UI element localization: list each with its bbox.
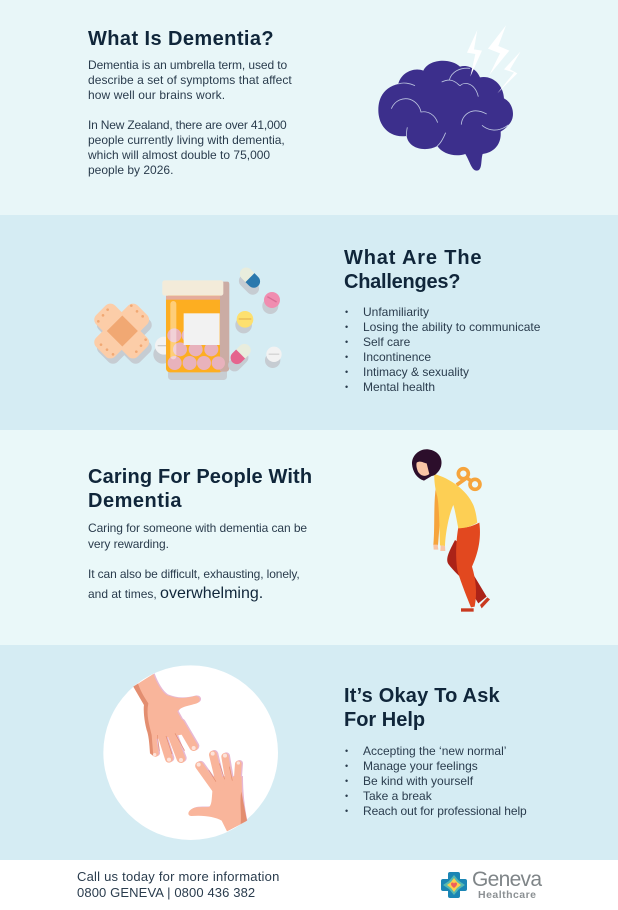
heading: challenges: What Are The bbox=[344, 247, 482, 269]
panel: challenges bbox=[0, 215, 618, 430]
near leg bbox=[456, 523, 480, 607]
text: call to action: 0800 GENEVA | 0800 436 382 bbox=[77, 884, 255, 900]
text: caring rewarding: Caring for someone with dementia can be bbox=[88, 521, 307, 535]
text: call to action: Call us today for more information bbox=[77, 869, 280, 884]
circle bbox=[103, 665, 278, 840]
list: help: Manage your feelings bbox=[363, 759, 478, 773]
far arm bbox=[433, 487, 441, 545]
text: dementia definition: Dementia is an umbrella term, used to bbox=[88, 58, 287, 72]
heading: what is dementia: What Is Dementia? bbox=[88, 28, 274, 50]
list: help: Take a break bbox=[363, 789, 432, 803]
text: caring rewarding bbox=[88, 521, 307, 551]
list: challenges: Self care bbox=[363, 335, 410, 349]
torso and arm bbox=[434, 474, 477, 546]
footer bbox=[0, 860, 618, 910]
text: caring difficult: and at times, overwhelming. bbox=[88, 585, 263, 602]
list: help: Accepting the ‘new normal’ bbox=[363, 744, 506, 758]
text: dementia definition bbox=[88, 58, 292, 102]
list: challenges bbox=[345, 305, 540, 394]
logo: geneva healthcare bbox=[441, 868, 542, 901]
far leg bbox=[447, 540, 487, 603]
text: caring rewarding: very rewarding. bbox=[88, 537, 169, 551]
icon: wind-up key bbox=[457, 469, 480, 489]
icon: pill bottle bbox=[162, 280, 229, 380]
text: dementia definition: how well our brains work. bbox=[88, 88, 225, 102]
upper hand bbox=[133, 673, 201, 762]
plaster shadow bbox=[94, 306, 154, 366]
text: caring difficult bbox=[88, 567, 300, 602]
heading: challenges: Challenges? bbox=[344, 271, 460, 293]
lower hand bbox=[188, 752, 247, 831]
icon: brain bbox=[378, 25, 521, 171]
list: challenges: Intimacy & sexuality bbox=[363, 365, 469, 379]
illustration: plaster and pills bbox=[91, 265, 282, 380]
heading: challenges bbox=[344, 247, 482, 293]
list: help bbox=[345, 744, 527, 818]
heading: caring: Caring For People With bbox=[88, 466, 312, 488]
icon: medical cross bbox=[441, 872, 467, 898]
illustration: reaching hands bbox=[103, 665, 278, 840]
list: challenges: Unfamiliarity bbox=[363, 305, 429, 319]
list: challenges: Mental health bbox=[363, 380, 435, 394]
illustration: person with wind-up key bbox=[412, 449, 490, 612]
heading: ask for help bbox=[344, 685, 500, 731]
icon: capsules and pills bbox=[226, 265, 282, 374]
text: call to action bbox=[77, 869, 280, 900]
heading: ask for help: It’s Okay To Ask bbox=[344, 685, 500, 707]
text: new zealand statistics: people by 2026. bbox=[88, 163, 173, 177]
text: new zealand statistics: people currently living with dementia, bbox=[88, 133, 285, 147]
text: new zealand statistics bbox=[88, 118, 286, 177]
text: caring difficult: It can also be difficult, exhausting, lonely, bbox=[88, 567, 300, 581]
panel: caring bbox=[0, 430, 618, 645]
panel: what is dementia bbox=[0, 0, 618, 215]
icon: plaster bbox=[91, 301, 152, 361]
panel: ask for help bbox=[0, 645, 618, 860]
list: help: Reach out for professional help bbox=[363, 804, 527, 818]
icon: loose white pill bbox=[153, 337, 173, 364]
list: challenges: Incontinence bbox=[363, 350, 431, 364]
text: new zealand statistics: which will almost double to 75,000 bbox=[88, 148, 270, 162]
text: geneva: Geneva bbox=[472, 868, 542, 891]
near foot bbox=[461, 608, 474, 612]
list: challenges: Losing the ability to communicate bbox=[363, 320, 540, 334]
far foot bbox=[480, 597, 490, 608]
text: dementia definition: describe a set of symptoms that affect bbox=[88, 73, 292, 87]
heading: caring: Dementia bbox=[88, 490, 182, 512]
text: healthcare: Healthcare bbox=[478, 889, 536, 901]
text: new zealand statistics: In New Zealand, there are over 41,000 bbox=[88, 118, 286, 132]
heading: ask for help: For Help bbox=[344, 709, 425, 731]
hair and face bbox=[412, 449, 442, 481]
heading: caring bbox=[88, 466, 312, 512]
list: help: Be kind with yourself bbox=[363, 774, 473, 788]
